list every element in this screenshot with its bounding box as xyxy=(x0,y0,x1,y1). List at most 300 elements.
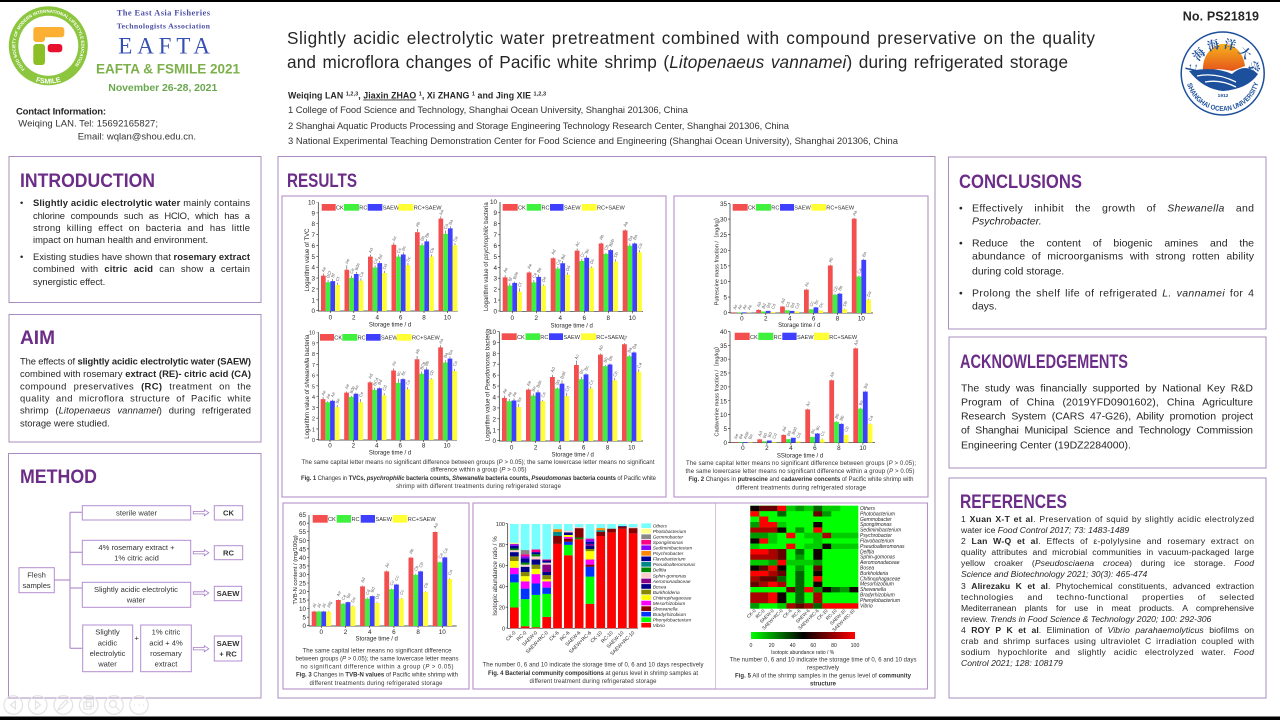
chart: Pseudomonas bacteria: Ba xyxy=(631,342,638,350)
chart: TVB-N: 50 xyxy=(299,538,306,545)
chart: TVC: 2 xyxy=(352,314,356,322)
chart: putrescine: Dc xyxy=(818,301,825,308)
panel: acknowledgements xyxy=(949,337,1266,468)
chart: Shewanella bacteria: Be xyxy=(334,397,341,404)
chart: cadaverine: 30 xyxy=(720,357,727,364)
chart: cadaverine: Cd xyxy=(771,432,778,439)
chart: TVC: CK xyxy=(336,206,344,212)
legend: Others xyxy=(653,524,668,530)
group labels xyxy=(214,506,243,661)
chart: cadaverine: 25 xyxy=(720,370,727,378)
text: reference list xyxy=(960,514,1254,668)
authors and affiliations: 1,2,3 xyxy=(534,92,546,98)
species labels: Spongiimonas xyxy=(860,522,892,528)
chart: putrescine: RC xyxy=(771,206,779,212)
chart: cadaverine: Ad xyxy=(781,425,788,432)
legend: Gemmobacter xyxy=(653,535,683,541)
chart: putrescine: Db xyxy=(842,300,849,307)
chart: Shewanella bacteria: 0 xyxy=(312,438,315,444)
chart: TVC: Cf xyxy=(335,276,341,282)
chart: stacked bacterial composition: 100 xyxy=(496,522,505,528)
chart: Pseudomonas bacteria: Cd xyxy=(564,385,571,392)
species labels: Vibrio xyxy=(860,603,873,609)
chart: TVC: Bb xyxy=(424,231,431,239)
flowchart: sample treatment groups: sterile water xyxy=(116,508,157,518)
species labels: Psychrobacter xyxy=(860,533,892,539)
chart: putrescine: Cc xyxy=(808,300,815,307)
chart: Shewanella bacteria: Logarithm value of shewanella bacteria xyxy=(305,334,311,439)
chart: cadaverine: 5 xyxy=(723,426,727,433)
chart: TVB-N: Aa xyxy=(432,522,439,529)
bars xyxy=(514,524,633,628)
chart: Shewanella bacteria: 8 xyxy=(312,352,315,358)
chart: putrescine: Cd xyxy=(784,301,791,308)
chart: TVC: 10 xyxy=(308,200,315,206)
chart: Pseudomonas bacteria: 2 xyxy=(492,416,496,423)
flowchart: sample treatment groups: 1% citric xyxy=(152,628,181,637)
colour scale legend: 60 xyxy=(810,643,816,649)
chart: TVB-N: 6 xyxy=(392,629,396,636)
species labels: Phenylobacterium xyxy=(860,598,900,604)
chart: cadaverine: SAEW xyxy=(797,335,814,341)
chart: TVC: Bde xyxy=(353,262,361,271)
panel: method xyxy=(8,454,261,698)
chart: cadaverine: Ad xyxy=(757,430,764,437)
group labels: + RC xyxy=(219,650,237,658)
chart: putrescine: Ae xyxy=(732,303,739,310)
chart: Shewanella bacteria: Ca xyxy=(452,360,459,367)
figure 2 panel xyxy=(674,196,928,497)
sample labels: RC-10 xyxy=(825,608,838,621)
flowchart: sample treatment groups: rosemary xyxy=(150,649,182,658)
chart: Pseudomonas bacteria: 1 xyxy=(492,427,496,434)
text: aim statement: quality and microflora structure of Pacific white xyxy=(20,392,251,404)
chart: Pseudomonas bacteria: 2 xyxy=(534,444,538,452)
chart: putrescine: Putrescine mass fraction /（mg/kg） xyxy=(714,215,720,305)
text: reference list: 3 Alirezaku K et al. Phytochemical constituents, advanced extraction xyxy=(961,581,1254,591)
chart: psychrophilic bacteria: De xyxy=(541,275,548,283)
chart: TVC: 10 xyxy=(444,314,451,322)
chart: cadaverine: CK xyxy=(750,335,758,341)
colour scale legend: 0 xyxy=(750,643,753,649)
chart: TVC: Bd xyxy=(377,253,384,260)
chart: Pseudomonas bacteria: 10 xyxy=(489,329,496,336)
species labels: Burkholderia xyxy=(860,571,888,577)
chart: putrescine: Cd xyxy=(770,302,777,310)
colour scale legend xyxy=(750,632,859,656)
text: reference list: water ice Food Control 2017; 73: 1483-1489 xyxy=(960,525,1129,535)
text: funding statement: The study was financially supported by National Key R&D xyxy=(961,382,1253,394)
text: reference list: sodium hypochlorite and slightly acidic electrolyzed water. Food xyxy=(961,647,1254,657)
chart: cadaverine: Ba xyxy=(863,382,869,389)
x labels: SAEW+RC-6 xyxy=(568,630,593,655)
legend: Vibrio xyxy=(653,623,665,629)
chart: Pseudomonas bacteria: Cb xyxy=(612,370,619,377)
chart: putrescine: Aa xyxy=(851,209,858,217)
chart: putrescine: Cd xyxy=(794,302,801,309)
x labels xyxy=(505,630,636,657)
sample labels: CK-0 xyxy=(746,608,757,619)
chart: Pseudomonas bacteria: 6 xyxy=(492,373,496,380)
chart: Pseudomonas bacteria: Ab xyxy=(598,344,604,351)
text: conclusion bullets: days. xyxy=(972,300,997,312)
chart: TVC: 4 xyxy=(375,314,379,322)
arrows to groups xyxy=(193,510,209,652)
authors and affiliations: 1 xyxy=(419,92,422,98)
chart: Shewanella bacteria: 6 xyxy=(312,374,315,380)
chart: Pseudomonas bacteria: Bde xyxy=(535,379,543,388)
chart: TVB-N: Af xyxy=(316,602,323,608)
chart: cadaverine: 10 xyxy=(720,412,727,419)
chart: Pseudomonas bacteria: Ad xyxy=(550,366,556,373)
conference branding: EAFTA: The East Asia Fisheries xyxy=(117,8,211,18)
chart: TVB-N: Af xyxy=(311,602,318,608)
flowchart: sample treatment groups: acidic xyxy=(98,638,117,647)
colour scale legend: 40 xyxy=(790,643,796,649)
chart: putrescine: 10 xyxy=(720,279,727,286)
sample labels xyxy=(746,608,856,633)
authors and affiliations xyxy=(288,90,899,146)
text: aim statement: The effects of slightly acidic electrolytic water (SAEW) xyxy=(20,356,251,366)
contact information: Contact Information: xyxy=(16,106,106,117)
chart: cadaverine: 6 xyxy=(813,445,817,452)
species labels: Flavobacterium xyxy=(860,538,894,544)
chart: Pseudomonas bacteria: 4 xyxy=(558,444,562,452)
legend: Photobacterium xyxy=(653,529,686,535)
sample labels: SAEW+RC-0 xyxy=(761,608,784,631)
chart: TVB-N: Afg xyxy=(326,600,333,608)
chart: Pseudomonas bacteria xyxy=(486,328,643,458)
chart: psychrophilic bacteria: 10 xyxy=(629,315,636,322)
chart: putrescine: Ab xyxy=(827,256,834,263)
chart: Pseudomonas bacteria: Ae xyxy=(502,387,508,394)
chart: Shewanella bacteria: Ab xyxy=(414,348,421,355)
chart: putrescine: Bd xyxy=(765,301,772,309)
caption: figure 1 xyxy=(301,460,657,490)
chart: Pseudomonas bacteria: RC+SAEW xyxy=(596,335,625,341)
chart: psychrophilic bacteria: Bbb xyxy=(608,238,615,247)
sample labels: CK-6 xyxy=(782,608,793,619)
caption: figure 5: structure xyxy=(810,682,837,688)
chart: psychrophilic bacteria: 0 xyxy=(511,315,515,322)
chart: Shewanella bacteria: 2 xyxy=(352,442,356,450)
authors and affiliations: , Xi ZHANG xyxy=(422,90,472,100)
heading: aim: AIM xyxy=(20,328,55,349)
chart: psychrophilic bacteria: 0 xyxy=(493,308,497,316)
chart: TVC: Logarithm value of TVC xyxy=(305,228,311,291)
x labels: SAEW-10 xyxy=(606,630,626,650)
chart: Shewanella bacteria: Bb xyxy=(424,359,430,367)
text: introduction bullets: • xyxy=(20,197,23,208)
contact information xyxy=(16,106,196,142)
chart: TVB-N: TVB-N content / (mg/100g) xyxy=(293,535,299,605)
chart: Pseudomonas bacteria: Bc xyxy=(578,368,585,375)
chart: Pseudomonas bacteria: Ba xyxy=(626,346,633,353)
legend: Shewanella xyxy=(653,606,678,612)
authors and affiliations: 3 National Experimental Teaching Demonstration Center for Food Science and Engineering (Shanghai Ocean University), Shanghai 201306, China xyxy=(288,135,899,146)
chart: TVB-N: 0 xyxy=(320,629,324,636)
chart: Pseudomonas bacteria: 5 xyxy=(492,384,496,391)
chart: Pseudomonas bacteria: Cc xyxy=(588,378,595,386)
chart: Pseudomonas bacteria: 10 xyxy=(628,444,636,452)
text: conclusion bullets: • xyxy=(959,202,963,214)
caption: figure 1: Fig. 1 Changes in TVCs, psychrophilic bacteria counts, Shewanella bacteria counts, Pseudomonas bacteria counts of Pacific white xyxy=(301,476,657,482)
chart: TVB-N: Cb xyxy=(423,581,429,589)
chart: cadaverine: Bc xyxy=(810,427,816,434)
chart: Shewanella bacteria: SAEW xyxy=(381,336,398,342)
species labels: Gemmobacter xyxy=(860,517,892,523)
group labels: CK xyxy=(223,508,234,518)
species labels: Chitinophagaceae xyxy=(860,576,901,582)
chart: Shewanella bacteria: Storage time / d xyxy=(369,450,411,456)
title: and microflora changes of Pacific white shrimp (Litopenaeus vannamei) during refrigerated storage xyxy=(287,52,1068,72)
chart: psychrophilic bacteria: Bd xyxy=(560,253,567,260)
chart: psychrophilic bacteria: Cf xyxy=(517,281,523,288)
chart: cadaverine: 40 xyxy=(720,329,727,336)
x labels: RC-0 xyxy=(516,630,528,643)
chart: TVB-N: 20 xyxy=(299,589,306,596)
chart: TVB-N: Ad xyxy=(360,576,366,583)
chart: TVB-N: 5 xyxy=(302,615,306,622)
panel: introduction xyxy=(9,156,261,302)
chart: Pseudomonas bacteria: 0 xyxy=(492,438,496,445)
chart: Pseudomonas bacteria: 6 xyxy=(582,444,586,452)
chart: Pseudomonas bacteria: Ae xyxy=(526,380,532,387)
authors and affiliations: 1 College of Food Science and Technology, Shanghai Ocean University, Shanghai 201306, China xyxy=(288,104,689,115)
chart: cadaverine: 8 xyxy=(837,445,841,452)
chart: Pseudomonas bacteria: Bdd xyxy=(559,370,567,380)
chart: Shewanella bacteria: 0 xyxy=(328,442,332,450)
chart: Shewanella bacteria: 6 xyxy=(398,442,402,450)
chart: cadaverine: Ade xyxy=(743,430,750,440)
chart: cadaverine: Bd xyxy=(767,431,773,438)
chart: psychrophilic bacteria: Ae xyxy=(502,266,509,273)
chart: TVB-N: Be xyxy=(345,592,352,599)
chart: TVC: RC+SAEW xyxy=(414,206,442,212)
chart: Shewanella bacteria: Bc xyxy=(400,369,407,376)
chart: TVB-N: 60 xyxy=(299,521,306,528)
chart: cadaverine: Ae xyxy=(733,432,740,440)
caption: figure 5: Fig. 5 All of the shrimp samples in the genus level of community xyxy=(735,674,912,680)
caption: figure 4: Fig. 4 Bacterial community compositions at genus level in shrimp samples at xyxy=(488,671,698,677)
chart: TVC: 0 xyxy=(311,308,315,315)
chart: Shewanella bacteria: Ad xyxy=(367,372,374,379)
presentation controls xyxy=(4,696,148,714)
text: introduction bullets: Slightly acidic electrolytic water mainly contains xyxy=(33,197,250,208)
x labels: SAEW-0 xyxy=(521,630,539,648)
chart: psychrophilic bacteria: Ad xyxy=(550,248,557,255)
chart: TVB-N: Cc xyxy=(394,574,400,581)
chart: psychrophilic bacteria: 2 xyxy=(535,315,539,322)
caption: figure 2: the same lowercase letter means no significant difference within a group (P > 0.05) xyxy=(686,469,914,475)
conference branding: EAFTA: Technologists Association xyxy=(117,21,211,30)
flowchart: sample treatment groups: water xyxy=(126,596,146,604)
chart: Shewanella bacteria: Bde xyxy=(348,385,356,394)
chart: TVC: Ac xyxy=(391,235,398,242)
text: reference list: 4 ROY P K et al. Elimination of Vibrio parahaemolyticus biofilms on xyxy=(961,625,1254,635)
chart: TVC: 1 xyxy=(311,297,315,304)
chart: TVB-N: De xyxy=(350,596,357,603)
logo: Shanghai Ocean University: 1912 xyxy=(1218,93,1229,99)
chart: psychrophilic bacteria: 2 xyxy=(493,287,497,294)
logo: Shanghai Ocean University: 上海海洋大学 xyxy=(1185,38,1260,72)
chart: putrescine: Ca xyxy=(856,267,863,274)
chart: cadaverine: 0 xyxy=(741,445,745,452)
chart: TVB-N: 15 xyxy=(299,598,306,605)
chart: TVC: Ad xyxy=(368,247,374,254)
chart: psychrophilic bacteria: 4 xyxy=(559,315,563,322)
chart: cadaverine: Bc xyxy=(815,424,821,431)
chart: cadaverine: Bd xyxy=(762,432,768,439)
chart: putrescine: Bd xyxy=(789,301,796,309)
chart: stacked bacterial composition: 80 xyxy=(499,543,505,549)
chart: putrescine: 30 xyxy=(720,217,727,224)
flowchart: sample treatment groups: 1% citric acid xyxy=(114,554,159,562)
chart: psychrophilic bacteria: RC+SAEW xyxy=(597,206,626,212)
chart: stacked bacterial composition: 40 xyxy=(499,585,505,591)
chart: cadaverine: RC+SAEW xyxy=(829,335,858,341)
chart: psychrophilic bacteria: 4 xyxy=(493,265,497,272)
chart: putrescine: Bc xyxy=(813,298,820,305)
chart: TVB-N: Cd xyxy=(365,588,371,596)
sample labels: CK-10 xyxy=(816,608,829,621)
chart: cadaverine: Bb xyxy=(834,412,840,419)
legend: Bosea xyxy=(653,584,667,590)
chart: psychrophilic bacteria: SAEW xyxy=(564,206,581,212)
chart: psychrophilic bacteria: 7 xyxy=(493,232,497,239)
logo: FSMILE: FOOD SOCIETY OF MODERN INTERNATIONAL LIFESTYLE EDUCATION xyxy=(12,10,84,71)
chart: stacked bacterial composition: 0 xyxy=(502,626,505,632)
flowchart: sample treatment groups: extract xyxy=(155,660,178,669)
caption: figure 2 xyxy=(686,461,916,492)
conference branding: EAFTA xyxy=(96,8,240,94)
sample labels: SAEW-10 xyxy=(829,608,847,626)
chart: putrescine: 0 xyxy=(723,310,727,317)
chart: TVB-N: 25 xyxy=(299,580,306,588)
chart: TVB-N: Ac xyxy=(384,561,391,568)
heading: references: REFERENCES xyxy=(960,492,1067,513)
chart: TVC: 6 xyxy=(399,314,403,322)
logo: FSMILE: FSMILE xyxy=(36,77,61,84)
chart: psychrophilic bacteria: Logarithm value of psychrophilic bacteria xyxy=(484,202,490,311)
chart: Shewanella bacteria: Ae xyxy=(320,389,327,396)
chart: cadaverine: Ba xyxy=(858,399,864,406)
chart: psychrophilic bacteria: Dc xyxy=(589,257,596,265)
chart: TVC: Ba xyxy=(447,218,454,225)
species labels: Shewanella xyxy=(860,587,886,593)
chart: cadaverine: 2 xyxy=(765,445,769,452)
chart: TVB-N: 2 xyxy=(344,629,348,636)
text: conclusion bullets: • xyxy=(959,238,963,250)
panel: conclusions xyxy=(948,157,1266,329)
group labels: SAEW xyxy=(217,639,240,648)
chart: putrescine: 4 xyxy=(788,316,792,322)
caption: figure 4 xyxy=(482,662,704,685)
chart: psychrophilic bacteria: Cb xyxy=(603,244,610,251)
chart: Pseudomonas bacteria: Storage time / d xyxy=(552,452,594,458)
chart: TVB-N: Ca xyxy=(442,547,449,554)
flowchart: sample treatment groups: water xyxy=(97,660,117,669)
authors and affiliations: 1 xyxy=(472,92,475,98)
chart: TVC: Ce xyxy=(349,267,356,274)
legend: Aeromonadaceae xyxy=(652,579,691,585)
chart: Shewanella bacteria: 4 xyxy=(375,442,379,450)
chart: TVB-N: Cc xyxy=(389,579,396,586)
heading: introduction: INTRODUCTION xyxy=(20,171,155,192)
chart: TVB-N: 10 xyxy=(299,606,306,613)
chart: Pseudomonas bacteria: 0 xyxy=(510,444,514,452)
authors and affiliations: and Jing XIE xyxy=(475,90,533,100)
chart: TVC: Ae xyxy=(321,266,327,273)
species labels: Pseudoalteromonas xyxy=(860,544,905,550)
chart: TVC: Cb xyxy=(429,246,435,254)
chart: TVB-N: 8 xyxy=(416,629,420,636)
chart: psychrophilic bacteria: Ca xyxy=(637,242,644,249)
flowchart: sample treatment groups: samples xyxy=(22,581,51,590)
group labels: SAEW xyxy=(217,589,240,598)
chart: Shewanella bacteria: Ac xyxy=(391,359,397,367)
chart: cadaverine: Bd xyxy=(786,429,792,437)
chart: Pseudomonas bacteria: Ae xyxy=(506,390,513,398)
chart: Shewanella bacteria: Ba xyxy=(447,349,454,356)
chart: TVC: Bf xyxy=(330,272,336,278)
conference branding: EAFTA: EAFTA & FSMILE 2021 xyxy=(96,61,240,76)
figure 5 panel xyxy=(716,503,928,689)
chart: psychrophilic bacteria: 10 xyxy=(490,199,497,206)
text: reference list: Mediterranean plants for use in meat products. A comprehensive xyxy=(961,603,1254,613)
x labels: SAEW+RC-0 xyxy=(525,630,550,655)
chart: psychrophilic bacteria: Ce xyxy=(531,271,538,279)
colour scale legend: Isotopic abundance ratio / % xyxy=(771,650,835,656)
panel: references xyxy=(949,478,1266,698)
chart: TVB-N: 0 xyxy=(302,623,306,630)
chart: Pseudomonas bacteria: Be xyxy=(530,385,537,392)
chart: TVB-N: Cb xyxy=(413,564,420,572)
chart: TVB-N: CK xyxy=(328,517,336,523)
x labels: CK-0 xyxy=(505,630,518,642)
chart: TVB-N: 30 xyxy=(299,572,306,579)
chart: TVB-N: 40 xyxy=(299,555,306,562)
legend: Phenylobacterium xyxy=(653,618,691,624)
chart: putrescine: 25 xyxy=(720,232,727,239)
chart: Shewanella bacteria: Aa xyxy=(438,337,444,344)
chart: putrescine: Ac xyxy=(804,280,810,287)
chart: TVC: Bc xyxy=(400,244,407,252)
chart: psychrophilic bacteria: 6 xyxy=(583,315,587,322)
chart: putrescine: 8 xyxy=(836,316,840,322)
heading: results: RESULTS xyxy=(287,171,357,192)
chart: putrescine: RC+SAEW xyxy=(826,206,855,212)
chart: TVB-N: Dd xyxy=(374,592,381,600)
chart: TVC: Da xyxy=(452,235,459,242)
chart: Shewanella bacteria: Ae xyxy=(330,391,336,398)
logo: Shanghai Ocean University xyxy=(1180,31,1265,116)
caption: figure 5: respectively xyxy=(807,666,839,672)
chart: TVB-N: Cc xyxy=(398,588,405,596)
text: conclusion bullets: Reduce the content of biogenic amines and the xyxy=(972,238,1254,250)
text: reference list: 1 Xuan X-T et al. Preservation of squid by slightly acidic electrolyzed xyxy=(961,514,1254,524)
chart: stacked bacterial composition xyxy=(492,522,696,657)
chart: psychrophilic bacteria: Storage time / d xyxy=(551,324,593,330)
species labels: Delftia xyxy=(860,549,874,555)
chart: psychrophilic bacteria: CK xyxy=(518,206,526,212)
chart: Pseudomonas bacteria: Be xyxy=(516,396,523,403)
x labels: RC-10 xyxy=(600,630,615,645)
chart: cadaverine: Cb xyxy=(843,425,850,432)
chart: Pseudomonas bacteria: CK xyxy=(517,335,525,341)
chart: Pseudomonas bacteria: Logarithm value of Pseudomonas bacteria xyxy=(486,328,492,441)
chart: TVC: 0 xyxy=(329,314,333,322)
